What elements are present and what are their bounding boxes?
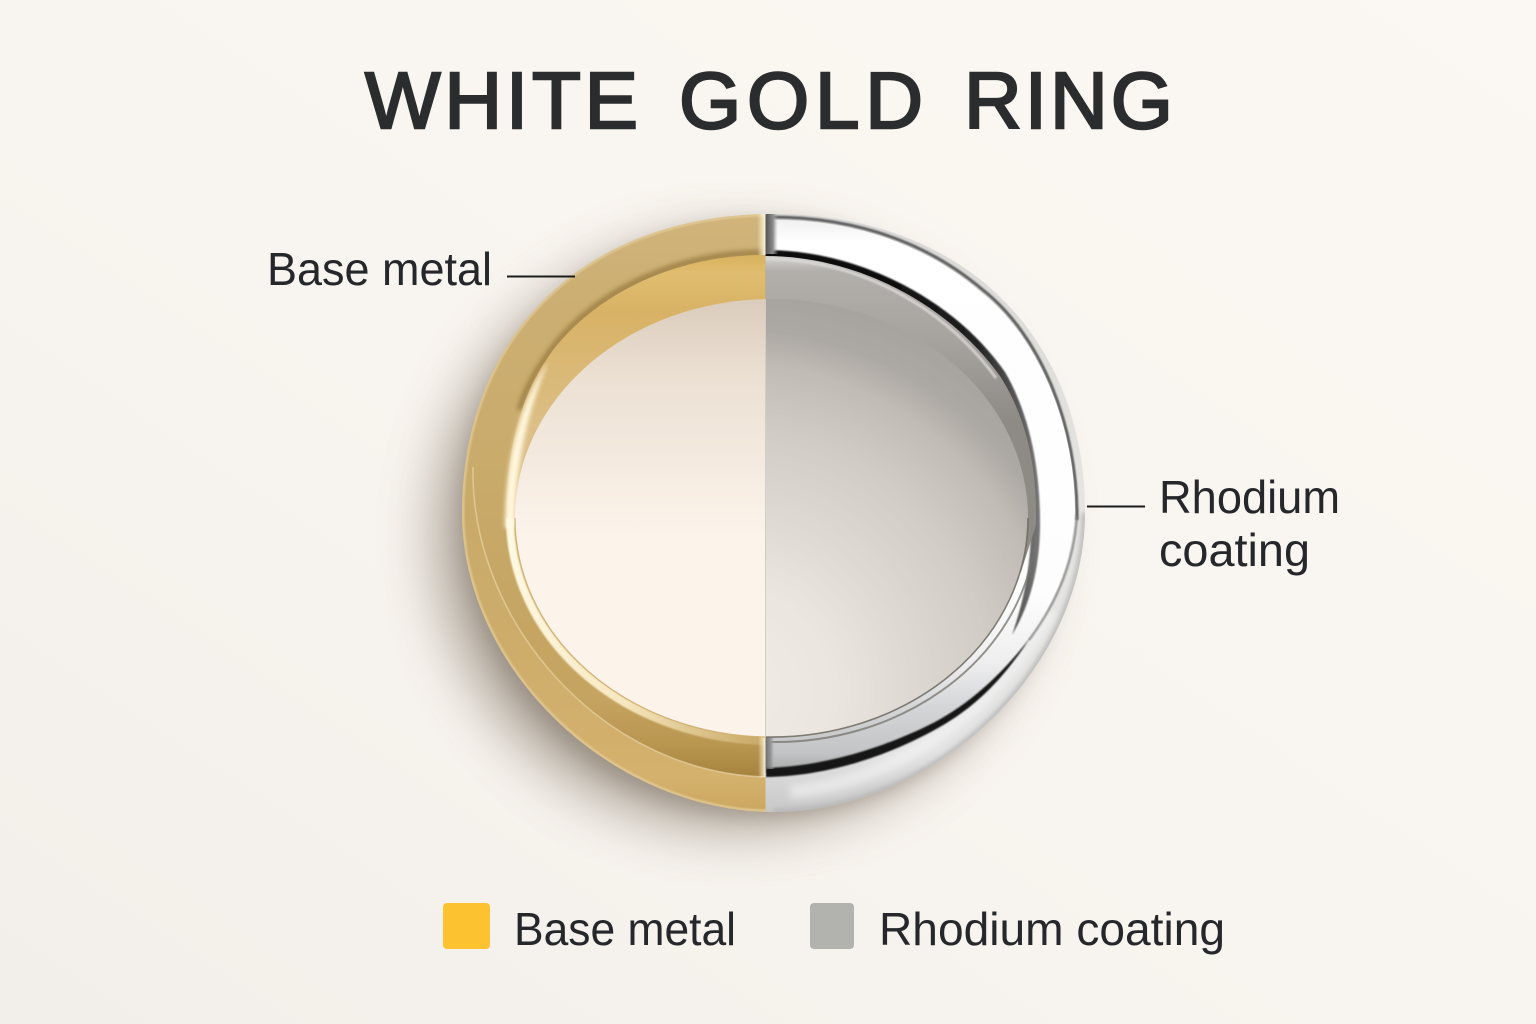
hole edge line silver — [766, 518, 1028, 737]
legend text: base metal: Base metal — [514, 903, 736, 955]
top-right dark rim — [770, 217, 1077, 520]
ring cast shadow — [433, 224, 1064, 831]
title: GOLD — [679, 56, 923, 145]
title: WHITE — [365, 56, 638, 145]
bright highlight lower — [510, 518, 772, 741]
label: rhodium coating — [1087, 471, 1340, 576]
front face lower — [528, 640, 764, 776]
inner wall — [507, 255, 765, 525]
lower outer edge shade — [774, 513, 1085, 812]
ring opening: warm half — [510, 295, 766, 745]
outer band — [765, 205, 1090, 820]
legend — [443, 903, 1225, 955]
legend text: rhodium coating: Rhodium coating — [879, 903, 1225, 955]
title: RING — [964, 56, 1173, 145]
band lower sheen — [790, 610, 1050, 792]
ring — [450, 205, 1090, 820]
inner wall — [765, 256, 1036, 572]
infographic canvas — [270, 71, 1338, 954]
label: base metal: Base metal — [267, 243, 492, 295]
end cap shading — [765, 214, 778, 254]
ring half: gold base metal — [450, 205, 774, 820]
outer band — [450, 205, 770, 820]
crease hairline — [473, 467, 765, 777]
upper crease shadow — [520, 253, 765, 410]
polished face — [765, 220, 1075, 773]
wall top edge highlight — [765, 259, 996, 378]
end cap highlights — [758, 214, 766, 255]
ring opening: grey half — [766, 336, 1028, 736]
label: rhodium coating: coating — [1159, 524, 1310, 576]
ring half: silver rhodium coating — [765, 205, 1090, 820]
hole edge line gold — [515, 518, 765, 737]
bright highlight upper — [505, 362, 548, 528]
centre divider — [764, 299, 766, 737]
upper crease dark — [765, 250, 1040, 635]
label: rhodium coating: Rhodium — [1159, 471, 1340, 523]
legend swatch: rhodium coating — [810, 903, 854, 949]
hole edge double line — [772, 560, 1032, 742]
rim lower fade — [1029, 515, 1077, 640]
outer soft rim — [462, 214, 774, 812]
lower crease — [766, 638, 1030, 777]
title — [365, 56, 1173, 145]
legend swatch: base metal — [443, 903, 490, 949]
